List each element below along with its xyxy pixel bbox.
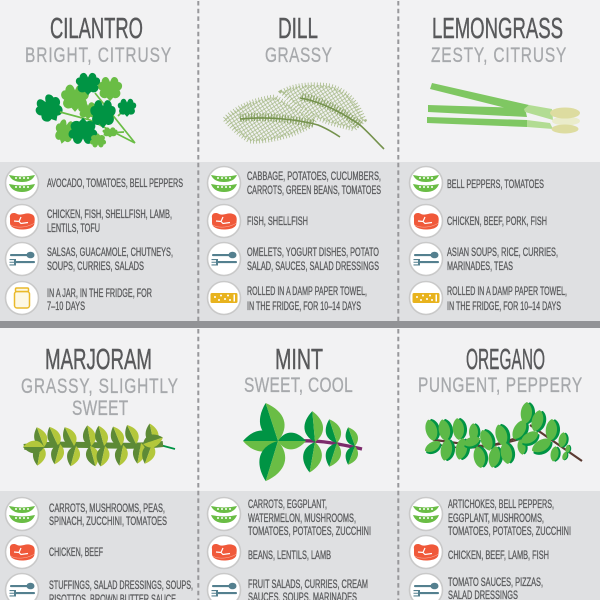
text: dishes (247, 245, 379, 273)
text: vegetables: WATERMELON, MUSHROOMS, (248, 511, 356, 525)
text: dishes (248, 577, 368, 600)
panel: marjoram (6, 344, 193, 600)
text: vegetables (448, 497, 571, 538)
text: protein: BEANS, LENTILS, LAMB (248, 548, 331, 562)
illustration: dill (225, 85, 384, 149)
icon: dishes (6, 242, 38, 276)
text: vegetables: TOMATOES, POTATOES, ZUCCHINI (248, 524, 371, 538)
text: dishes (47, 245, 173, 273)
icon: dishes (410, 242, 442, 276)
text: dishes (49, 578, 193, 600)
row separator bar (0, 321, 600, 328)
icon: jar storage (6, 282, 38, 314)
panel: cilantro (6, 13, 183, 314)
text: vegetables (248, 497, 371, 538)
subtitle: dill flavour: GRASSY (265, 42, 332, 67)
text: storage: ROLLED IN A DAMP PAPER TOWEL, (247, 284, 367, 298)
icon: vegetables (6, 498, 38, 530)
text: vegetables: EGGPLANT, MUSHROOMS, (448, 511, 544, 525)
panel: mint (208, 344, 371, 600)
subtitle: lemongrass flavour: ZESTY, CITRUSY (431, 42, 567, 67)
text: vegetables: AVOCADO, TOMATOES, BELL PEPPERS (47, 176, 183, 190)
text: protein: FISH, SHELLFISH (247, 214, 308, 228)
icon: protein (410, 204, 442, 238)
icon: vegetables (208, 498, 240, 530)
icon: protein (410, 536, 442, 568)
illustration: oregano (423, 401, 582, 469)
text: vegetables: CABBAGE, POTATOES, CUCUMBERS, (247, 169, 381, 183)
text: protein: CHICKEN, FISH, SHELLFISH, LAMB, (47, 207, 172, 221)
text: dishes: SOUPS, CURRIES, SALADS (47, 259, 144, 273)
panel: dill (208, 13, 384, 314)
text: storage (447, 284, 567, 313)
icon: vegetables (208, 166, 240, 200)
subtitle: marjoram flavour: GRASSY, SLIGHTLY (21, 373, 178, 398)
icon: protein (208, 204, 240, 238)
text: vegetables: CARROTS, MUSHROOMS, PEAS, (49, 501, 165, 515)
ingredient band bottom row (0, 491, 600, 600)
text: storage (247, 284, 367, 313)
panel: lemongrass (410, 13, 580, 314)
icon: dishes (208, 574, 240, 600)
text: protein (47, 207, 172, 235)
icon: dishes (208, 242, 240, 276)
icon: dishes (410, 574, 442, 600)
illustration: mint (243, 399, 362, 485)
text: storage: IN A JAR, IN THE FRIDGE, FOR (47, 286, 152, 300)
text: dishes (448, 575, 543, 600)
text: dishes: MARINADES, TEAS (447, 259, 513, 273)
illustration: cilantro (31, 73, 136, 147)
text: dishes (447, 245, 558, 273)
icon: protein (6, 536, 38, 568)
icon: vegetables (410, 166, 442, 200)
ingredient band top row (0, 162, 600, 321)
text: dishes: OMELETS, YOGURT DISHES, POTATO (247, 245, 379, 259)
icon: vegetables (410, 498, 442, 530)
illustration: lemongrass (427, 83, 580, 134)
text: storage: IN THE FRIDGE, FOR 10–14 DAYS (247, 299, 361, 313)
icon: vegetables (6, 166, 38, 200)
subtitle: marjoram flavour (21, 373, 178, 420)
subtitle: cilantro flavour: BRIGHT, CITRUSY (25, 42, 172, 67)
heading: mint: MINT (275, 344, 323, 376)
subtitle: marjoram flavour: SWEET (72, 395, 128, 420)
icon: protein (208, 536, 240, 568)
icon: dishes (6, 574, 38, 600)
heading: dill: DILL (278, 13, 318, 45)
text: protein: LENTILS, TOFU (47, 221, 100, 235)
text: storage (47, 286, 152, 313)
illustration: marjoram (23, 422, 175, 468)
subtitle: mint flavour: SWEET, COOL (244, 372, 353, 397)
heading: marjoram: MARJORAM (45, 344, 152, 376)
heading: cilantro: CILANTRO (50, 13, 143, 45)
text: vegetables (247, 169, 381, 197)
text: vegetables: SPINACH, ZUCCHINI, TOMATOES (49, 514, 167, 528)
text: dishes: SALAD, SAUCES, SALAD DRESSINGS (247, 259, 379, 273)
text: storage: 7–10 DAYS (47, 299, 85, 313)
icon: paper towel storage (410, 282, 442, 314)
text: vegetables: CARROTS, GREEN BEANS, TOMATOES (247, 183, 381, 197)
text: dishes: FRUIT SALADS, CURRIES, CREAM (248, 577, 368, 591)
text: vegetables: CARROTS, EGGPLANT, (248, 497, 327, 511)
text: dishes: STUFFINGS, SALAD DRESSINGS, SOUPS, (49, 578, 193, 592)
icon: paper towel storage (208, 282, 240, 314)
panel: oregano (410, 344, 583, 600)
icon: protein (6, 204, 38, 238)
text: protein: CHICKEN, BEEF (49, 545, 103, 559)
text: vegetables (49, 501, 167, 528)
text: dishes: TOMATO SAUCES, PIZZAS, (448, 575, 543, 589)
subtitle: oregano flavour: PUNGENT, PEPPERY (418, 372, 583, 397)
text: dishes: SALSAS, GUACAMOLE, CHUTNEYS, (47, 245, 173, 259)
